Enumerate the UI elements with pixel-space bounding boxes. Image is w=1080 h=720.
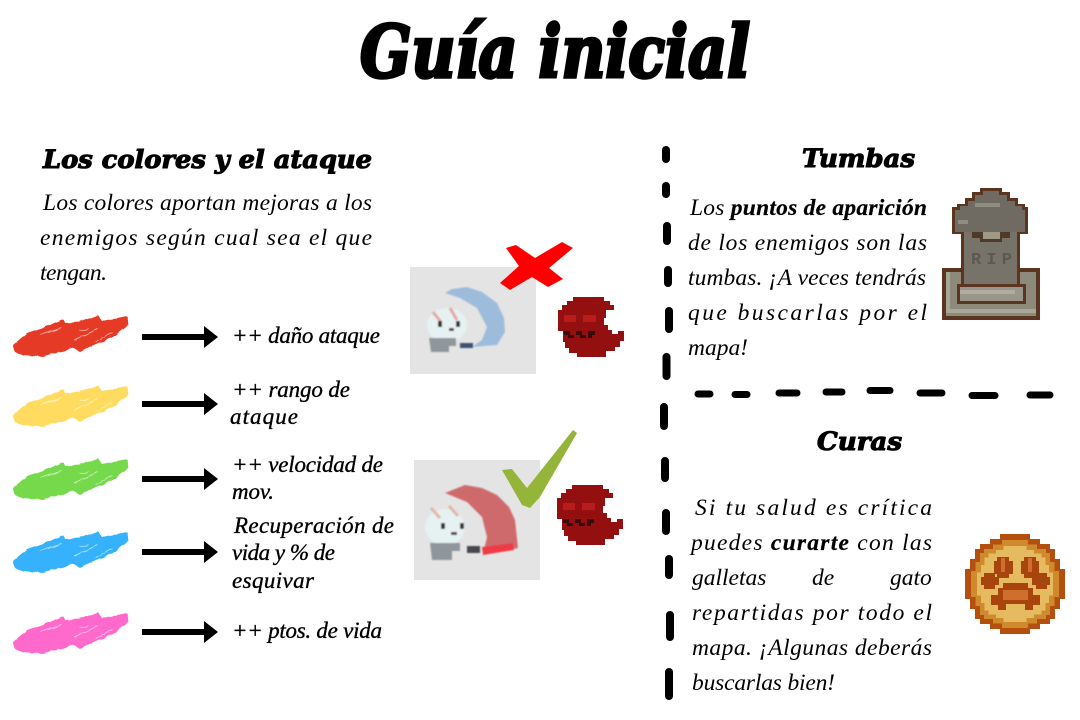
label: movement speed xyxy=(232,452,383,504)
text block: healing body: mapa. ¡Algunas deberás xyxy=(692,635,932,661)
swatch: red xyxy=(13,315,129,357)
label: recovery and dodge: esquivar xyxy=(232,568,315,593)
text block: healing body: gato xyxy=(890,565,932,591)
text block: healing body: Si tu salud es crítica xyxy=(695,495,932,521)
text block: graves body: mapa! xyxy=(688,335,748,361)
label: recovery and dodge: vida y % de xyxy=(232,540,335,565)
screenshot: correct attack colour xyxy=(414,460,540,580)
text block: colours intro: tengan. xyxy=(40,260,107,286)
sprite: enemy top xyxy=(558,297,624,357)
heading: graves: Tumbas xyxy=(802,144,915,173)
text block: colours intro xyxy=(40,190,372,286)
text block: graves body: Los puntos de aparición xyxy=(689,195,927,221)
label: health points: ++ ptos. de vida xyxy=(232,618,382,643)
panel: colours and attack xyxy=(13,145,394,654)
icon: tombstone xyxy=(942,188,1040,320)
heading: healing: Curas xyxy=(817,427,902,456)
label: recovery and dodge xyxy=(232,513,394,593)
icon: green check mark xyxy=(502,430,577,508)
arrow: blue xyxy=(142,541,218,563)
arrow: pink xyxy=(142,621,218,643)
icon: tombstone: RIP xyxy=(971,251,1012,270)
panel: graves xyxy=(688,144,1040,361)
label: movement speed: ++ velocidad de xyxy=(232,452,383,477)
text block: graves body: que buscarlas por el xyxy=(688,300,927,326)
icon: cat paw cookie xyxy=(965,534,1065,634)
text block: graves body xyxy=(688,195,927,361)
label: attack range: ataque xyxy=(230,404,298,429)
swatch: yellow xyxy=(13,385,129,427)
text block: colours intro: Los colores aportan mejoras a los xyxy=(42,190,372,216)
screenshot: wrong attack colour xyxy=(410,267,536,374)
panel: healing xyxy=(689,427,1065,696)
text block: healing body: repartidas por todo el xyxy=(692,600,932,626)
swatch: green xyxy=(13,458,129,500)
sprite: enemy bottom xyxy=(557,485,623,545)
title: Guía inicial xyxy=(360,9,750,94)
arrow: yellow xyxy=(142,393,218,415)
swatch: pink xyxy=(13,612,129,654)
text block: graves body: tumbas. ¡A veces tendrás xyxy=(688,265,926,291)
arrow: red xyxy=(142,326,218,348)
icon: red cross xyxy=(500,242,573,290)
label: movement speed: mov. xyxy=(232,479,274,504)
text block: graves body: de los enemigos son las xyxy=(688,230,927,256)
label: recovery and dodge: Recuperación de xyxy=(233,513,394,538)
heading: colours and attack: Los colores y el ataque xyxy=(42,145,372,174)
swatch: blue xyxy=(13,531,129,573)
text block: colours intro: enemigos según cual sea el que xyxy=(40,225,372,251)
text block: healing body: de xyxy=(812,565,834,591)
text block: healing body: galletas xyxy=(692,565,766,591)
label: attack damage: ++ daño ataque xyxy=(232,323,380,348)
text block: healing body: puedes curarte con las xyxy=(689,530,932,556)
label: attack range: ++ rango de xyxy=(232,377,350,402)
text block: healing body: buscarlas bien! xyxy=(692,670,835,696)
arrow: green xyxy=(142,468,218,490)
label: attack range xyxy=(230,377,350,429)
text block: healing body xyxy=(689,495,932,696)
